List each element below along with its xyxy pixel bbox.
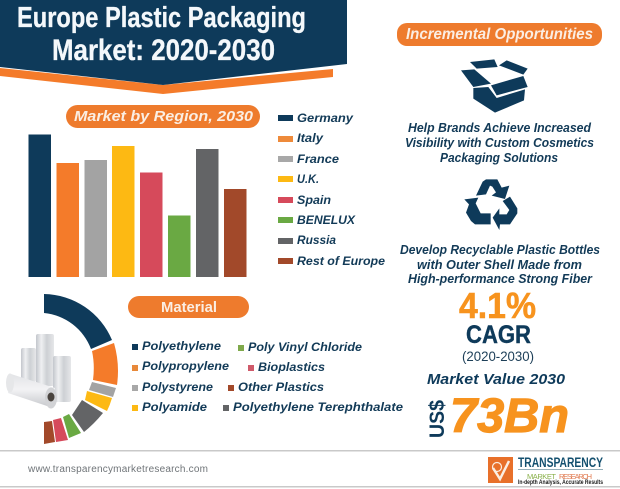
heading: market by region: Market by Region, 2030 [74, 108, 254, 125]
footer url: www.transparencymarketresearch.com [27, 464, 208, 475]
legend: materials: Polystyrene [142, 380, 213, 394]
legend: regions: U.K. [297, 172, 319, 186]
title [17, 2, 306, 67]
stat: CAGR: (2020-2030) [462, 348, 534, 364]
logo: transparency market research [488, 455, 604, 486]
legend: materials: Bioplastics [258, 360, 325, 374]
bar chart: market by region [28, 134, 246, 277]
legend: materials: Polypropylene [142, 359, 229, 373]
text: opportunity one: Visibility with Custom Cosmetics [405, 135, 594, 150]
legend: regions: BENELUX [297, 213, 356, 227]
text: opportunity two: with Outer Shell Made from [417, 257, 582, 272]
icon: recycle symbol [464, 179, 517, 230]
legend: regions [278, 111, 385, 268]
footer rules [0, 450, 620, 488]
legend: regions: Italy [297, 131, 324, 145]
title: Market: 2020-2030 [52, 34, 275, 67]
legend: regions: France [297, 152, 339, 166]
stat: CAGR: CAGR [466, 321, 531, 349]
logo: transparency market research: In-depth Analysis, Accurate Results [518, 480, 604, 486]
icon: open box [461, 59, 528, 113]
illustration: plastic film rolls [6, 334, 71, 408]
logo: transparency market research: MARKET [527, 472, 556, 481]
stat: market value: US$ [426, 400, 449, 438]
text: opportunity two [400, 242, 600, 286]
heading: incremental opportunities [397, 23, 602, 46]
stat: market value: Market Value 2030 [427, 371, 566, 388]
legend: materials: Polyamide [142, 400, 207, 414]
text: opportunity one: Help Brands Achieve Increased [408, 120, 592, 135]
header banner [0, 0, 347, 94]
stat: market value [426, 371, 569, 443]
donut chart: material share [44, 294, 118, 444]
text: opportunity one [405, 120, 594, 165]
stat: CAGR [459, 285, 536, 364]
heading: material: Material [161, 299, 217, 316]
logo: transparency market research: RESEARCH [559, 472, 592, 481]
legend: materials: Other Plastics [238, 380, 324, 394]
text: opportunity one: Packaging Solutions [440, 150, 558, 165]
text: opportunity two: High-performance Strong Fiber [408, 271, 593, 286]
legend: regions: Russia [297, 233, 336, 247]
heading: incremental opportunities: Incremental Opportunities [406, 26, 593, 43]
stat: CAGR: 4.1% [459, 285, 536, 326]
legend: regions: Germany [297, 111, 354, 125]
stat: market value: 73Bn [450, 390, 569, 443]
heading: material [128, 296, 249, 318]
title: Europe Plastic Packaging [17, 2, 306, 34]
legend: regions: Spain [297, 193, 331, 207]
legend: materials: Poly Vinyl Chloride [248, 340, 362, 354]
text: opportunity two: Develop Recyclable Plastic Bottles [400, 242, 600, 257]
legend: materials [132, 339, 403, 414]
heading: market by region [66, 105, 260, 128]
legend: materials: Polyethylene Terephthalate [233, 400, 403, 414]
legend: materials: Polyethylene [142, 339, 221, 353]
legend: regions: Rest of Europe [297, 254, 385, 268]
